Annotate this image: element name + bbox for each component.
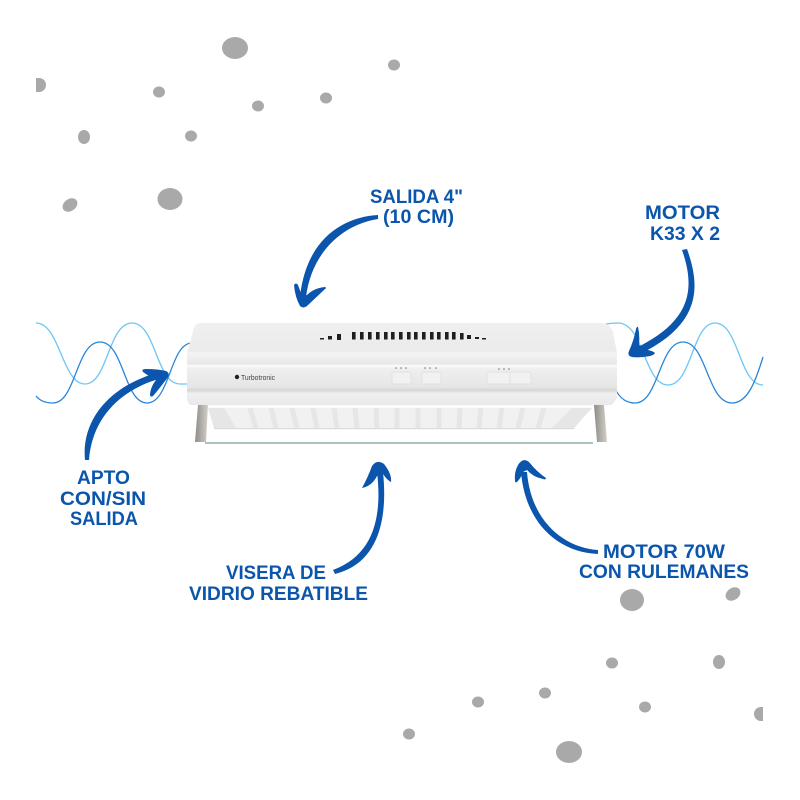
label: apto con/sin salida	[60, 468, 146, 530]
label: motor 70w con rulemanes: CON RULEMANES	[579, 562, 749, 583]
label: apto con/sin salida: SALIDA	[70, 509, 138, 530]
arrow: visera	[333, 462, 391, 574]
brand logo: Turbotronic	[241, 373, 275, 382]
control buttons	[392, 372, 531, 384]
label: motor k33 x 2: MOTOR	[645, 203, 720, 224]
button marks	[395, 367, 510, 370]
arrow: motor 70w	[515, 460, 598, 554]
range hood	[187, 323, 617, 444]
label: motor k33 x 2: K33 X 2	[650, 224, 720, 245]
label: salida 4: (10 CM)	[383, 207, 454, 228]
label: salida 4: SALIDA 4"	[370, 187, 463, 208]
label: motor 70w con rulemanes: MOTOR 70W	[603, 542, 725, 563]
label: visera de vidrio rebatible: VISERA DE	[226, 563, 326, 584]
label: salida 4	[370, 187, 463, 228]
arrow: motor k33	[628, 249, 695, 357]
arrow: salida	[294, 215, 378, 308]
hood body	[187, 323, 617, 405]
glass visor	[205, 442, 593, 444]
label: apto con/sin salida: CON/SIN	[60, 489, 146, 510]
background dots: top	[36, 37, 400, 215]
arrow: apto con/sin salida	[85, 369, 169, 460]
label: motor k33 x 2	[645, 203, 720, 245]
hood legs	[195, 405, 607, 442]
sound waves: right	[606, 323, 763, 403]
label: motor 70w con rulemanes	[579, 542, 749, 583]
background dots: bottom	[403, 584, 763, 763]
label: visera de vidrio rebatible	[189, 563, 368, 605]
filter panel	[208, 405, 592, 429]
sound waves: left	[36, 323, 192, 403]
vent slots	[320, 332, 486, 340]
label: visera de vidrio rebatible: VIDRIO REBATIBLE	[189, 584, 368, 605]
label: apto con/sin salida: APTO	[77, 468, 130, 489]
